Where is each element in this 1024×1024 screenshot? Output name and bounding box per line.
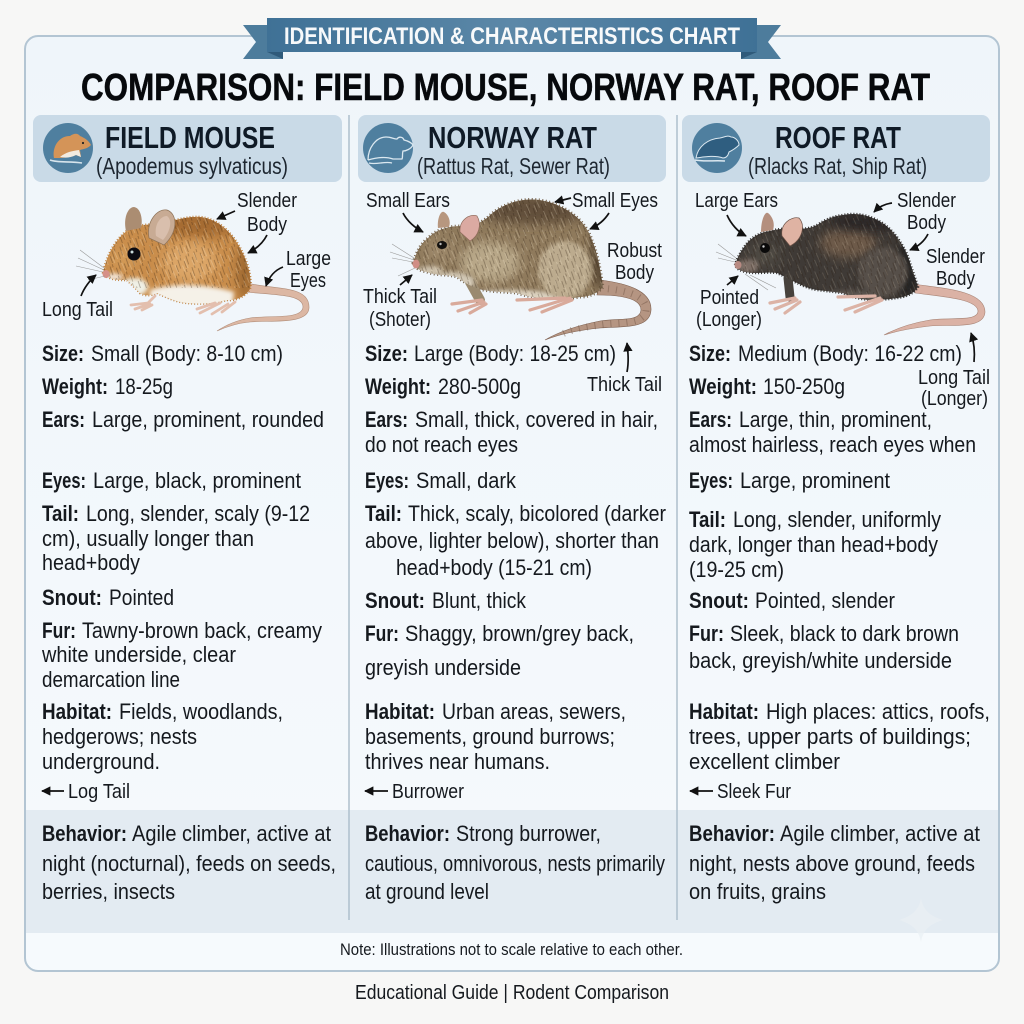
banner text: IDENTIFICATION & CHARACTERISTICS CHART xyxy=(284,23,740,50)
callouts: roof rat: Slender xyxy=(897,190,956,212)
fur: Fur: xyxy=(42,618,76,643)
size: Large (Body: 18-25 cm) xyxy=(414,341,616,366)
callouts: norway rat xyxy=(363,190,662,396)
header: field mouse: FIELD MOUSE xyxy=(105,120,275,155)
callouts: roof rat: Body xyxy=(907,212,946,234)
fur: Fur: xyxy=(689,621,724,646)
tail: Thick, scaly, bicolored (darker xyxy=(408,501,666,526)
habitat: thrives near humans. xyxy=(365,749,550,774)
ears: Large, prominent, rounded xyxy=(92,407,324,432)
tail: cm), usually longer than xyxy=(42,526,254,551)
note: log tail: Log Tail xyxy=(68,781,130,803)
callouts: field mouse: Long Tail xyxy=(42,299,113,321)
weight xyxy=(365,374,521,399)
fur: Tawny-brown back, creamy xyxy=(82,618,322,643)
behavior: Behavior: xyxy=(689,821,775,846)
fur: Shaggy, brown/grey back, xyxy=(405,621,634,646)
header: roof rat xyxy=(682,115,990,182)
eyes xyxy=(365,468,517,493)
fur: Sleek, black to dark brown xyxy=(730,621,959,646)
fur xyxy=(365,621,634,680)
callouts: roof rat: Body xyxy=(936,268,975,290)
behavior: night (nocturnal), feeds on seeds, xyxy=(42,851,336,876)
habitat: Habitat: xyxy=(689,699,759,724)
callouts: roof rat: Slender xyxy=(926,246,985,268)
ears: Large, thin, prominent, xyxy=(739,407,932,432)
tail: Long, slender, uniformly xyxy=(733,507,941,532)
habitat: hedgerows; nests xyxy=(42,724,197,749)
behavior: Strong burrower, xyxy=(456,821,601,846)
snout: Blunt, thick xyxy=(432,588,527,613)
tail: Tail: xyxy=(42,501,79,526)
icon: field mouse xyxy=(43,123,93,173)
habitat: Habitat: xyxy=(365,699,435,724)
behavior: night, nests above ground, feeds xyxy=(689,851,975,876)
note: log tail xyxy=(42,781,130,803)
panel: roof rat xyxy=(682,115,990,904)
behavior: Agile climber, active at xyxy=(780,821,980,846)
callouts: field mouse: Body xyxy=(247,214,287,236)
weight xyxy=(689,374,845,399)
callouts: roof rat xyxy=(695,190,990,410)
callouts: roof rat: Pointed xyxy=(700,287,759,309)
eyes: Small, dark xyxy=(416,468,517,493)
header: norway rat: NORWAY RAT xyxy=(428,120,597,155)
illustration: roof rat xyxy=(716,208,985,335)
behavior xyxy=(365,821,665,904)
weight xyxy=(42,374,173,399)
ears: do not reach eyes xyxy=(365,432,518,457)
panel: norway rat xyxy=(358,115,666,904)
fur xyxy=(41,618,322,692)
behavior: berries, insects xyxy=(42,879,175,904)
callouts: roof rat: (Longer) xyxy=(921,388,988,410)
footer: Educational Guide | Rodent Comparison xyxy=(355,982,669,1004)
habitat: Habitat: xyxy=(42,699,112,724)
header: norway rat xyxy=(358,115,666,182)
ears xyxy=(689,407,976,457)
behavior: Behavior: xyxy=(365,821,450,846)
weight: 280-500g xyxy=(438,374,521,399)
weight: 150-250g xyxy=(763,374,845,399)
callouts: field mouse: Slender xyxy=(237,190,297,212)
habitat: Urban areas, sewers, xyxy=(442,699,626,724)
fur: Fur: xyxy=(365,621,399,646)
callouts: norway rat: Body xyxy=(615,262,654,284)
fur: demarcation line xyxy=(42,667,180,692)
note: burrower xyxy=(365,781,464,803)
callouts: field mouse: Eyes xyxy=(290,270,326,292)
ears: Ears: xyxy=(42,407,85,432)
header: roof rat: (Rlacks Rat, Ship Rat) xyxy=(748,153,927,179)
ears: Ears: xyxy=(365,407,408,432)
snout: Snout: xyxy=(42,585,102,610)
ears: Ears: xyxy=(689,407,732,432)
fur: back, greyish/white underside xyxy=(689,648,952,673)
behavior: Behavior: xyxy=(42,821,127,846)
header: field mouse xyxy=(33,115,342,182)
callouts: field mouse: Large xyxy=(286,248,331,270)
weight: Weight: xyxy=(689,374,757,399)
ribbon banner xyxy=(243,18,781,59)
illustration: field mouse xyxy=(76,207,309,331)
tail: Tail: xyxy=(365,501,402,526)
fur: greyish underside xyxy=(365,655,521,680)
snout: Pointed xyxy=(109,585,174,610)
habitat xyxy=(689,699,990,774)
note: sleek fur xyxy=(690,781,791,803)
eyes: Large, prominent xyxy=(740,468,890,493)
ears xyxy=(365,407,658,457)
behavior: Agile climber, active at xyxy=(132,821,331,846)
eyes: Eyes: xyxy=(365,468,409,493)
callouts: norway rat: Small Eyes xyxy=(572,190,658,212)
tail: Tail: xyxy=(689,507,726,532)
tail: (19-25 cm) xyxy=(689,557,784,582)
habitat: trees, upper parts of buildings; xyxy=(689,724,971,749)
callouts: norway rat: (Shoter) xyxy=(369,309,431,331)
snout xyxy=(365,588,527,613)
ears: almost hairless, reach eyes when xyxy=(689,432,976,457)
behavior: cautious, omnivorous, nests primarily xyxy=(365,851,665,876)
snout xyxy=(42,585,174,610)
habitat: excellent climber xyxy=(689,749,840,774)
behavior xyxy=(42,821,336,904)
icon: norway rat xyxy=(363,123,413,173)
size: Medium (Body: 16-22 cm) xyxy=(738,341,962,366)
eyes: Eyes: xyxy=(689,468,733,493)
header: norway rat: (Rattus Rat, Sewer Rat) xyxy=(417,153,610,179)
size: Size: xyxy=(365,341,408,366)
behavior band xyxy=(26,810,998,933)
eyes: Large, black, prominent xyxy=(93,468,301,493)
weight: Weight: xyxy=(365,374,431,399)
header: field mouse: (Apodemus sylvaticus) xyxy=(96,153,288,179)
snout: Pointed, slender xyxy=(755,588,895,613)
ears: Small, thick, covered in hair, xyxy=(415,407,658,432)
icon: roof rat xyxy=(692,123,742,173)
habitat xyxy=(42,699,283,774)
weight: Weight: xyxy=(42,374,108,399)
footnote: Note: Illustrations not to scale relative to each other. xyxy=(340,940,683,959)
behavior: at ground level xyxy=(365,879,489,904)
column divider xyxy=(348,115,350,920)
facts: norway rat xyxy=(365,341,666,904)
tail: head+body xyxy=(42,550,140,575)
snout xyxy=(689,588,895,613)
habitat: Fields, woodlands, xyxy=(119,699,283,724)
size: Size: xyxy=(42,341,84,366)
panel: field mouse xyxy=(33,115,342,904)
header: roof rat: ROOF RAT xyxy=(775,120,901,155)
snout: Snout: xyxy=(689,588,749,613)
size: Small (Body: 8-10 cm) xyxy=(91,341,283,366)
callouts: norway rat: Thick Tail xyxy=(587,374,662,396)
facts: field mouse xyxy=(41,341,336,904)
note: burrower: Burrower xyxy=(392,781,464,803)
snout: Snout: xyxy=(365,588,425,613)
eyes xyxy=(689,468,890,493)
tail: above, lighter below), shorter than xyxy=(365,528,659,553)
callouts: roof rat: Long Tail xyxy=(918,367,990,389)
fur: white underside, clear xyxy=(41,642,236,667)
tail xyxy=(689,507,941,582)
illustration: norway rat xyxy=(390,195,651,340)
fur xyxy=(689,621,959,673)
size: Size: xyxy=(689,341,731,366)
habitat: High places: attics, roofs, xyxy=(766,699,990,724)
callouts: field mouse xyxy=(42,190,331,321)
behavior xyxy=(689,821,980,904)
callouts: norway rat: Robust xyxy=(607,240,662,262)
tail: Long, slender, scaly (9-12 xyxy=(86,501,310,526)
tail: head+body (15-21 cm) xyxy=(396,555,592,580)
note: sleek fur: Sleek Fur xyxy=(717,781,791,803)
habitat: underground. xyxy=(42,749,160,774)
callouts: norway rat: Thick Tail xyxy=(363,286,437,308)
tail xyxy=(42,501,310,575)
tail: dark, longer than head+body xyxy=(689,532,938,557)
tail xyxy=(365,501,666,580)
habitat xyxy=(365,699,626,774)
facts: roof rat xyxy=(689,341,990,904)
column divider xyxy=(676,115,678,920)
sparkle watermark xyxy=(899,898,943,942)
weight: 18-25g xyxy=(115,374,173,399)
behavior: on fruits, grains xyxy=(689,879,826,904)
callouts: roof rat: Large Ears xyxy=(695,190,778,212)
eyes: Eyes: xyxy=(42,468,86,493)
callouts: norway rat: Small Ears xyxy=(366,190,450,212)
habitat: basements, ground burrows; xyxy=(365,724,615,749)
callouts: roof rat: (Longer) xyxy=(696,309,762,331)
